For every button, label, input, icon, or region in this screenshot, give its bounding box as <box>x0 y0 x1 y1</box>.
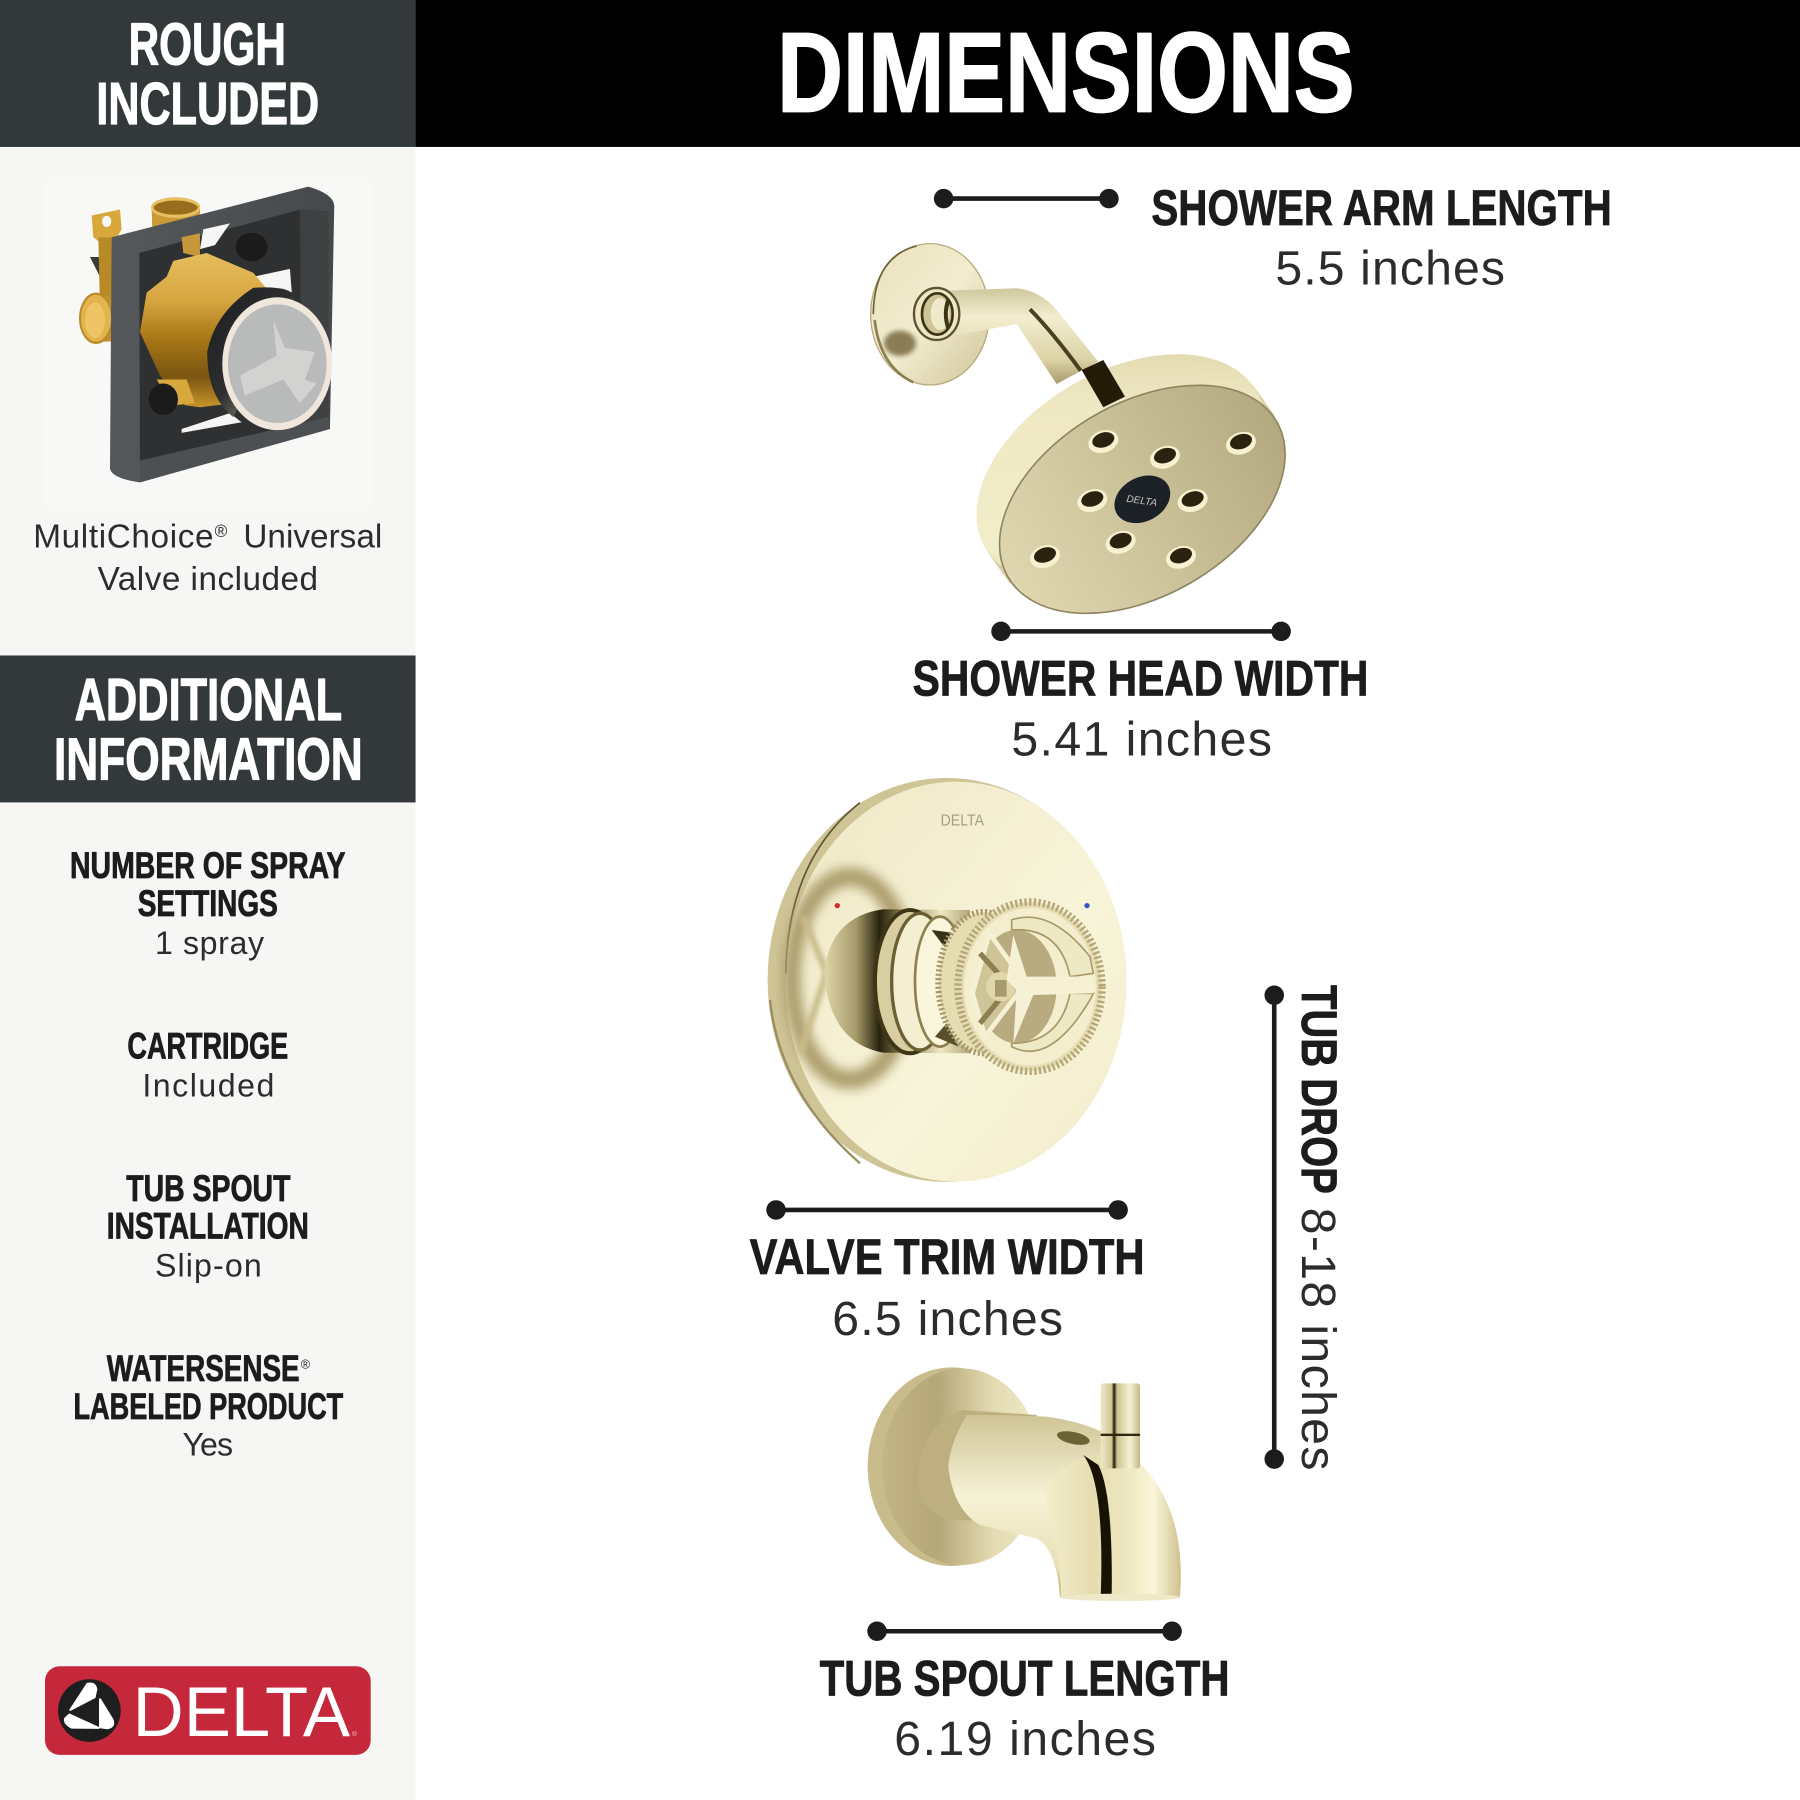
logo: delta: DELTA <box>133 1672 350 1751</box>
caption: valve <box>33 519 382 598</box>
spec: tub spout installation: TUB SPOUT <box>126 1168 291 1209</box>
dimension: tub drop: TUB DROP <box>1291 985 1348 1194</box>
dimension: shower head width <box>913 622 1368 766</box>
product: shower head: DELTA <box>1126 494 1158 509</box>
dimension: tub drop <box>1264 985 1348 1471</box>
heading: rough included: ROUGH <box>129 10 286 77</box>
spec: watersense: LABELED PRODUCT <box>73 1386 344 1427</box>
dimension: valve trim width: 6.5 inches <box>832 1292 1063 1346</box>
logo: delta <box>45 1666 371 1755</box>
dimension: tub spout length: TUB SPOUT LENGTH <box>820 1650 1229 1707</box>
spec: tub spout installation <box>107 1168 309 1284</box>
caption: valve: ® <box>215 521 228 541</box>
spec: watersense: Yes <box>183 1427 233 1463</box>
product: shower head <box>871 244 1326 662</box>
spec: cartridge: CARTRIDGE <box>127 1025 288 1066</box>
heading: additional information: ADDITIONAL <box>75 666 342 733</box>
product: tub spout <box>868 1367 1181 1601</box>
frame body <box>110 187 334 482</box>
dimension: shower arm length <box>934 179 1612 296</box>
heading: dimensions: DIMENSIONS <box>777 9 1355 136</box>
dimension: tub spout length <box>820 1621 1229 1766</box>
dimension: shower arm length: 5.5 inches <box>1275 242 1505 296</box>
panel: sidebar background <box>0 0 416 1800</box>
heading: additional information <box>0 655 416 802</box>
spec: spray settings: SETTINGS <box>138 883 278 924</box>
dimension: tub spout length: 6.19 inches <box>894 1712 1156 1766</box>
heading: dimensions <box>416 0 1800 147</box>
dimension: shower arm length: SHOWER ARM LENGTH <box>1151 179 1612 236</box>
caption: valve: Valve included <box>98 561 318 598</box>
spec: watersense: WATERSENSE <box>107 1348 300 1389</box>
dimension: valve trim width <box>750 1200 1145 1346</box>
dimension: shower head width: 5.41 inches <box>1011 712 1272 766</box>
spec: watersense: ® <box>301 1357 311 1371</box>
product: valve trim: DELTA <box>941 812 985 829</box>
spec: spray settings: 1 spray <box>155 925 264 961</box>
product: valve trim <box>768 778 1127 1182</box>
spec: spray settings: NUMBER OF SPRAY <box>70 845 346 886</box>
logo: delta: ® <box>352 1730 357 1738</box>
heading: additional information: INFORMATION <box>54 725 363 792</box>
caption: valve: MultiChoice <box>33 519 214 556</box>
spray nozzles <box>1027 426 1259 573</box>
heading: rough included <box>0 0 416 147</box>
icon: rough-in valve <box>43 178 373 510</box>
dimension: valve trim width: VALVE TRIM WIDTH <box>750 1228 1145 1285</box>
spec: cartridge: Included <box>142 1067 274 1103</box>
heading: rough included: INCLUDED <box>96 70 319 137</box>
spec: spray settings <box>70 845 346 961</box>
caption: valve: Universal <box>243 519 382 556</box>
spec: tub spout installation: INSTALLATION <box>107 1206 309 1247</box>
spec: cartridge <box>127 1025 288 1103</box>
dimension: shower head width: SHOWER HEAD WIDTH <box>913 650 1368 707</box>
spec: watersense <box>73 1348 344 1463</box>
dimension: tub drop: 8-18 inches <box>1291 1208 1345 1471</box>
spec: tub spout installation: Slip-on <box>155 1248 262 1284</box>
